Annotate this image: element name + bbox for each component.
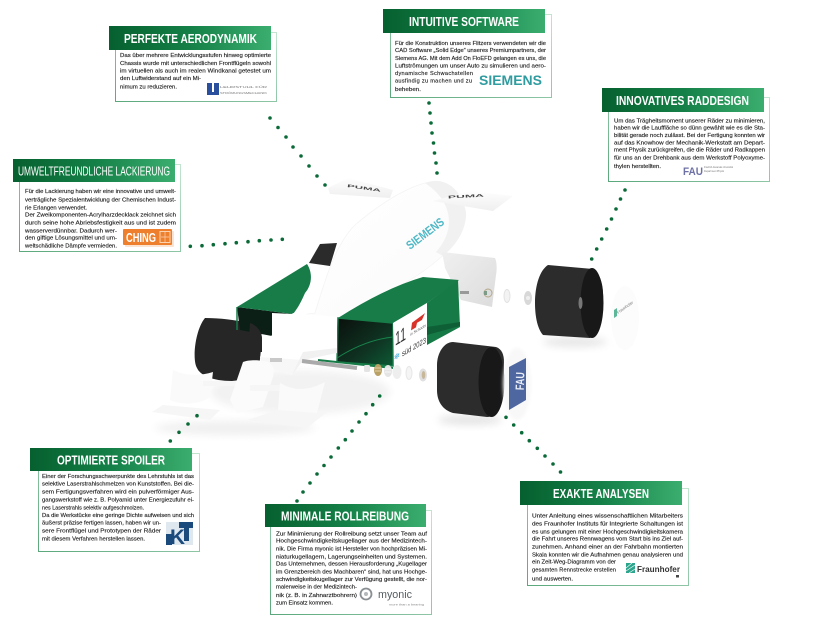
logo: myonic (360, 588, 424, 606)
text block: sere Frontflügel und Prototypen der Räder (42, 529, 161, 535)
text block: Um das Trägheitsmoment unserer Räder zu minimieren, (614, 118, 765, 124)
sponsor number plate: süd 2023 (402, 335, 426, 359)
text block: Das Unternehmen, dessen Herausforderung „Kugellager (276, 561, 427, 567)
text block: Das über mehrere Entwicklungsstufen hinweg optimierte (120, 53, 271, 59)
text block: Einer der Forschungsschwerpunkte des Lehrstuhls ist das (42, 474, 194, 480)
logo: FAU (683, 165, 733, 178)
text block: Für die Konstruktion unseres Flitzers verwendeten wir die (395, 41, 546, 47)
text block (24, 189, 176, 249)
text block: gangswerkstoff wie z. B. Polyamid unter Energiezufuhr ei- (42, 498, 194, 504)
exploded race car illustration (152, 178, 639, 435)
sponsor number plate: in Schools (410, 323, 426, 337)
text block: auf das Knowhow der Mechanik-Werkstatt am Depart- (614, 140, 765, 146)
text block (276, 532, 427, 607)
text block: des Fraunhofer Instituts für Integrierte Schaltungen ist (532, 521, 684, 527)
sponsor number plate: 11 (395, 323, 406, 350)
text block: haben wir die Lauffläche so dünn gewählt wie es die Sta- (614, 126, 765, 132)
Siemens lettering on body: SIEMENS (403, 215, 447, 252)
logo: Fraunhofer (626, 563, 681, 578)
text block: Der Zweikomponenten-Acrylharzdecklack zeichnet sich (25, 212, 176, 218)
front wing assembly (152, 360, 327, 428)
panel: Exakte Analysen (520, 481, 688, 586)
text block: ausfindig zu machen und zu (395, 79, 472, 85)
text block: schwindigkeitskugellager zur Verfügung gestellt, die nor- (276, 577, 427, 583)
heading: MINIMALE ROLLREIBUNG (281, 510, 409, 524)
rear wing right (433, 191, 513, 211)
text block: malerweise in der Medizintech- (276, 584, 357, 590)
heading (30, 448, 192, 471)
text block: zum Einsatz kommen. (276, 601, 333, 607)
sponsor number plate (393, 303, 427, 363)
text block: verträgliche Spezialentwicklung der Chemischen Indust- (25, 197, 176, 203)
dotted connector: paint to left duct (188, 238, 284, 248)
text block: äußerst präzise fertigen lassen, haben wir un- (42, 521, 161, 527)
Fraunhofer hub cap (611, 286, 639, 350)
text block: weltschädliche Dämpfe vermieden. (24, 243, 117, 249)
logo: KT (166, 522, 193, 549)
text block: Zur Minimierung der Rollreibung setzt unser Team auf (276, 532, 427, 538)
text block: gesamten Rennstrecke erstellen (532, 567, 616, 573)
text block: im virtuellen als auch im realen Windkanal getestet um (120, 68, 271, 74)
rear wing left (328, 178, 393, 198)
text block: Luftströmungen um unser Auto zu simulieren und aero- (395, 64, 546, 70)
logo: myonic: myonic (378, 589, 412, 601)
logo: FAU: FAU (683, 166, 703, 178)
text block: CAD Software „Solid Edge“ unseres Premiumpartners, der (395, 48, 546, 54)
heading (109, 26, 271, 50)
FAU hub cap (503, 348, 531, 420)
text block: Skala konnten wir die Aufnahmen genau analysieren und (532, 553, 683, 559)
panel: Intuitive Software (383, 9, 552, 98)
text block: durch seine hohe Abriebsfestigkeit aus und ist zudem (25, 220, 176, 226)
text block: die Fahrt unseres Rennwagens vom Start bis ins Ziel auf- (532, 536, 683, 542)
text block: beheben. (395, 87, 421, 93)
front right wheel (437, 342, 504, 417)
panel: Optimierte Spoiler (30, 448, 200, 552)
text block: den Luftwiderstand auf ein Mi- (120, 76, 201, 82)
text block: nes Laserstrahls selektiv aufgeschmolzen. (42, 506, 144, 512)
logo: myonic: more than a bearing (389, 602, 424, 606)
text block: nik (z. B. in Zahnarztbohrern) (276, 593, 357, 599)
panel: Perfekte Aerodynamik (109, 26, 276, 102)
text block: selektive Laserstrahlschmelzen von Kunststoffen. Bei die- (42, 482, 194, 488)
sponsor number plate: ✻ (394, 350, 400, 362)
logo: chair: LEHRSTUHL FÜR (220, 85, 269, 89)
logo: chair (207, 83, 269, 95)
main body and engine cover (295, 183, 465, 318)
axle rod and bearings (302, 361, 427, 382)
logo: chair: STRÖMUNGSMECHANIK (220, 91, 267, 95)
text block (614, 118, 765, 170)
text block: bilität gerade noch zulässt. Bei der Fertigung konnten wir (614, 133, 765, 139)
text block: Chassis wurde mit unterschiedlichen Frontflügeln sowohl (120, 61, 271, 67)
nose cone (260, 313, 337, 375)
text block: dynamische Schwachstellen (395, 71, 473, 77)
text block: zunehmen. Anhand einer an der Fahrbahn montierten (532, 544, 683, 550)
rear axle box (442, 252, 532, 307)
text block: rie Erlangen verwendet. (25, 205, 87, 211)
text block: niaturkugellagern, Lagerungseinheiten und Systemen. (276, 555, 427, 561)
logo: FAU: Department Physik (704, 169, 724, 173)
text block: wasserverdünnbar. Dadurch wer- (24, 228, 117, 234)
text block (42, 474, 194, 542)
rear wheel (535, 265, 604, 338)
text block: den giftige Lösungsmittel und um- (25, 235, 117, 241)
text block: es uns gelungen mit einer Hochgeschwindigkeitskamera (532, 529, 684, 535)
heading: INTUITIVE SOFTWARE (409, 15, 519, 29)
logo: FAU: Friedrich-Alexander-Universität (704, 165, 733, 169)
dotted connector: wheel design to rear wheel (590, 188, 627, 261)
text block (120, 53, 271, 90)
dotted connector: software to car body (427, 101, 439, 175)
left front wheel (195, 318, 262, 381)
heading (265, 504, 426, 527)
text block: Unter Anleitung eines wissenschaftlichen Mitarbeiters (532, 513, 683, 519)
text block: Für die Lackierung haben wir eine innovative und umwelt- (25, 189, 176, 195)
text block: und auswerten. (532, 576, 573, 582)
rear wing left: PUMA (347, 183, 382, 193)
heading: INNOVATIVES RADDESIGN (616, 94, 749, 108)
text block: ein Zeit-Weg-Diagramm von der (532, 559, 616, 565)
dotted connector: rolling friction to bearings (295, 394, 382, 503)
heading (383, 9, 545, 33)
left side duct (237, 264, 311, 336)
text block: für uns an der Drehbank aus dem Werkstoff Polyoxyme- (614, 155, 765, 161)
cockpit opening (309, 243, 337, 266)
rear wing right: PUMA (448, 193, 484, 199)
heading: OPTIMIERTE SPOILER (57, 454, 165, 468)
dotted connector: analyses to front wheel (504, 416, 562, 474)
Fraunhofer hub cap: Fraunhofer (616, 299, 635, 315)
dotted connector: aerodynamics to rear wing (268, 116, 327, 187)
logo: KT: K (170, 526, 185, 549)
heading: EXAKTE ANALYSEN (553, 487, 649, 501)
text block: sem Fertigungsverfahren wird ein pulverförmiger Aus- (42, 490, 194, 496)
FAU hub cap: FAU (513, 372, 527, 390)
heading: UMWELTFREUNDLICHE LACKIERUNG (18, 164, 170, 178)
text block: Da die Werkstücke eine geringe Dichte aufweisen und sich (42, 513, 194, 519)
panel: Innovatives Raddesign (602, 88, 770, 182)
text block: mit diesem Verfahren herstellen lassen. (42, 536, 145, 542)
text block: ment Physik zurückgreifen, die die Räder und Radkappen (614, 148, 765, 154)
logo: Ching: CHING (126, 230, 156, 245)
dotted connector: spoiler to front wing (168, 414, 199, 443)
logo: Ching (123, 229, 174, 247)
panel: Umweltfreundliche Lackierung (13, 159, 180, 252)
heading (13, 159, 175, 182)
text block: nik. Die Firma myonic ist Hersteller von hochpräzisen Mi- (276, 547, 427, 553)
text block (532, 513, 684, 582)
logo: Fraunhofer: Fraunhofer (637, 564, 681, 574)
heading: PERFEKTE AERODYNAMIK (124, 32, 257, 46)
text block (395, 41, 546, 93)
heading (520, 481, 682, 505)
right side duct with sponsor plate (318, 277, 460, 368)
logo: Siemens: SIEMENS (479, 73, 542, 88)
text block: thylen herstellten. (614, 164, 661, 170)
text block: nimum zu reduzieren. (120, 84, 177, 90)
panel: Minimale Rollreibung (265, 504, 432, 614)
text block: Siemens AG. Mit dem Add On FloEFD gelangen es uns, die (395, 56, 546, 62)
text block: Hochgeschwindigkeitskugellager aus der Medizintech- (276, 539, 427, 545)
heading (602, 88, 764, 112)
text block: im Grenzbereich des Machbaren“ sind, hat uns Hochge- (276, 569, 427, 575)
